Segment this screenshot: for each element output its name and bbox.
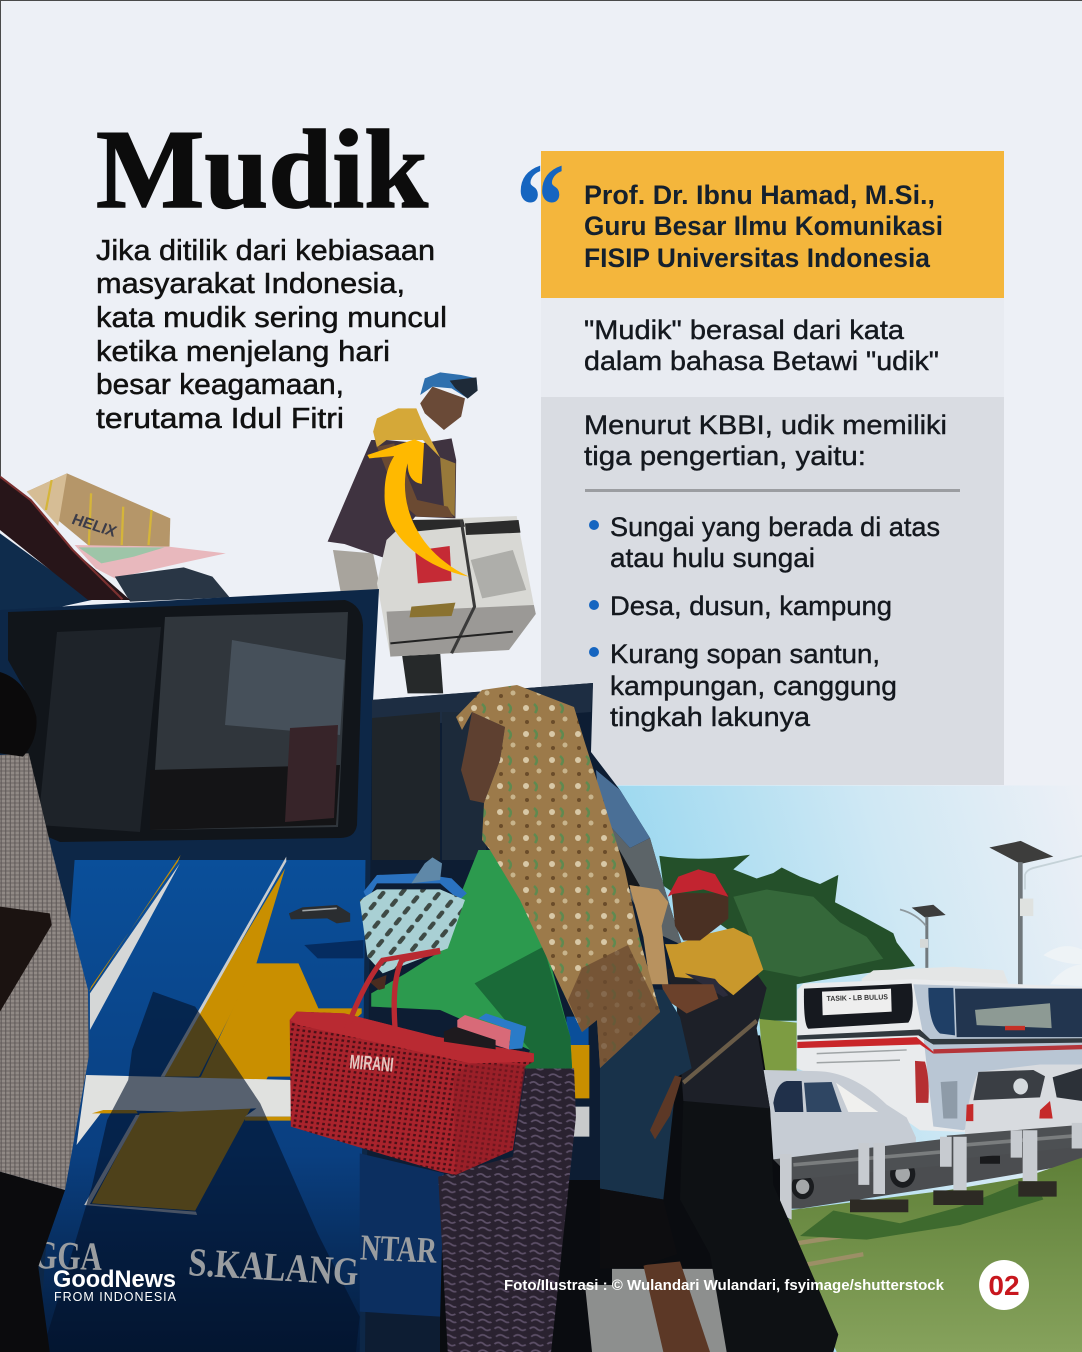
- face: [420, 387, 465, 430]
- lower leg: [402, 652, 443, 693]
- trees: [659, 855, 915, 1021]
- yellow shoulder: [665, 928, 763, 995]
- bus: [797, 967, 1082, 1132]
- icon: curved arrow: [367, 439, 469, 577]
- speaker name: Prof. Dr. Ibnu Hamad, M.Si.,: [584, 180, 935, 210]
- grass foreground: [787, 1158, 1082, 1352]
- intro paragraph: kata mudik sering muncul: [96, 302, 447, 334]
- woman with headscarf: [290, 685, 660, 1352]
- origin text: dalam bahasa Betawi "udik": [584, 346, 939, 376]
- silver car: [763, 1070, 916, 1199]
- child shorts: [600, 1189, 677, 1269]
- trousers: [333, 550, 381, 592]
- KBBI intro text: Menurut KBBI, udik memiliki: [584, 410, 947, 440]
- blue side with stripes: [33, 855, 589, 1352]
- background road scene: [600, 785, 1082, 1352]
- basket lettering: MIRANI: [349, 1051, 395, 1076]
- panel: speaker heading: [541, 151, 1004, 298]
- striped cloth: [75, 545, 226, 578]
- van lettering: S.KALANG: [187, 1241, 360, 1295]
- road behind rail: [773, 1145, 1082, 1209]
- van lettering: [33, 1227, 438, 1295]
- lamp posts: [900, 841, 1082, 984]
- child legs: [643, 1262, 710, 1352]
- red cap: [668, 869, 728, 897]
- van lettering: GGA: [33, 1234, 103, 1279]
- strap: [683, 1021, 757, 1083]
- cardboard box: HELIX: [69, 511, 119, 541]
- roof cargo: [0, 473, 230, 620]
- bullet 1: Sungai yang berada di atas: [610, 512, 940, 542]
- bullet 1: [589, 512, 940, 573]
- road foreground: [600, 1269, 773, 1352]
- woman's trousers: [680, 1101, 838, 1352]
- van lettering: NTAR: [359, 1227, 438, 1271]
- bullet 2: Desa, dusun, kampung: [610, 591, 892, 621]
- shirt: [328, 438, 456, 557]
- bullet 1: atau hulu sungai: [610, 543, 815, 573]
- ground behind skirt: [440, 1180, 612, 1352]
- man at left in checked shirt: [0, 672, 89, 1352]
- bullet 3: kampungan, canggung: [610, 671, 897, 701]
- bus destination sign: [822, 989, 892, 1015]
- photo scene: road, bus and people: [0, 372, 1082, 1352]
- door handle: [289, 905, 350, 923]
- upper yellow stripe: [161, 868, 285, 1077]
- white belt: [77, 1075, 293, 1145]
- bullet 3: Kurang sopan santun,: [610, 639, 880, 669]
- door gap panel: [372, 712, 440, 860]
- skirt: [290, 850, 576, 1352]
- guard rail: [773, 1123, 1082, 1220]
- speaker name: Guru Besar Ilmu Komunikasi: [584, 211, 943, 241]
- cardboard box: [27, 473, 170, 547]
- towel: [629, 885, 668, 984]
- logo: FROM INDONESIA: [54, 1290, 177, 1304]
- bullet list: [589, 512, 940, 732]
- intro paragraph: masyarakat Indonesia,: [96, 268, 405, 300]
- blue van: [0, 589, 682, 1352]
- logo: GoodNews: [53, 1266, 176, 1293]
- man carrying box: [328, 372, 536, 693]
- cabin window strip: [372, 683, 593, 728]
- green blouse: [371, 850, 572, 1068]
- trousers: [0, 1172, 65, 1352]
- face: [672, 893, 728, 941]
- intro paragraph: Jika ditilik dari kebiasaan: [96, 235, 435, 267]
- origin text: [584, 315, 939, 376]
- icon: quotation mark: “: [516, 139, 565, 274]
- cap: [420, 372, 478, 398]
- intro paragraph: ketika menjelang hari: [96, 336, 390, 368]
- arm: [377, 443, 453, 517]
- bullet 3: [589, 639, 897, 732]
- intro paragraph: terutama Idul Fitri: [96, 403, 344, 435]
- intro paragraph: besar keagamaan,: [96, 369, 344, 401]
- bullet 3: tingkah lakunya: [610, 702, 811, 732]
- origin text: "Mudik" berasal dari kata: [584, 315, 905, 345]
- checked shirt: [0, 753, 89, 1190]
- arm shadow: [369, 975, 387, 990]
- van rear body: [300, 683, 682, 1352]
- page number: [979, 1260, 1029, 1310]
- bus destination sign: TASIK - LB BULUS: [827, 994, 888, 1003]
- panel: KBBI definitions: [541, 397, 1004, 785]
- speaker name: [584, 180, 943, 273]
- white stripe: [90, 863, 180, 1030]
- van lower right stripes: [566, 1017, 589, 1137]
- dark ground behind people: [600, 1035, 800, 1271]
- body shadow: [42, 992, 360, 1352]
- red basket: [290, 950, 534, 1175]
- hatchback car: [965, 1065, 1082, 1164]
- grass behind bus: [759, 1019, 797, 1072]
- door window: [38, 612, 348, 832]
- face: [461, 712, 505, 803]
- child shirt: [600, 988, 692, 1200]
- blue roof mass: [0, 533, 92, 620]
- light basket: [360, 857, 467, 973]
- page number: 02: [988, 1270, 1020, 1301]
- arm: [662, 984, 718, 1013]
- generator box: [377, 516, 536, 657]
- panel: origin of the word: [541, 298, 1004, 397]
- van side door: [0, 589, 379, 1352]
- headscarf: [456, 685, 660, 1068]
- main yellow chevron: [92, 963, 362, 1211]
- basket goods: [444, 1013, 526, 1049]
- intro paragraph: [96, 235, 447, 435]
- tarp: [115, 567, 230, 602]
- photo credit: Foto/Ilustrasi : © Wulandari Wulandari, fsyimage/shutterstock: [504, 1277, 945, 1294]
- KBBI intro text: tiga pengertian, yaitu:: [584, 441, 866, 471]
- title: Mudik: [96, 108, 429, 232]
- shirt dark: [667, 951, 770, 1108]
- arm: [0, 907, 52, 1012]
- KBBI intro text: [584, 410, 947, 471]
- speaker name: FISIP Universitas Indonesia: [584, 243, 931, 273]
- right woman in yellow shirt: [600, 869, 838, 1352]
- head: [0, 672, 37, 757]
